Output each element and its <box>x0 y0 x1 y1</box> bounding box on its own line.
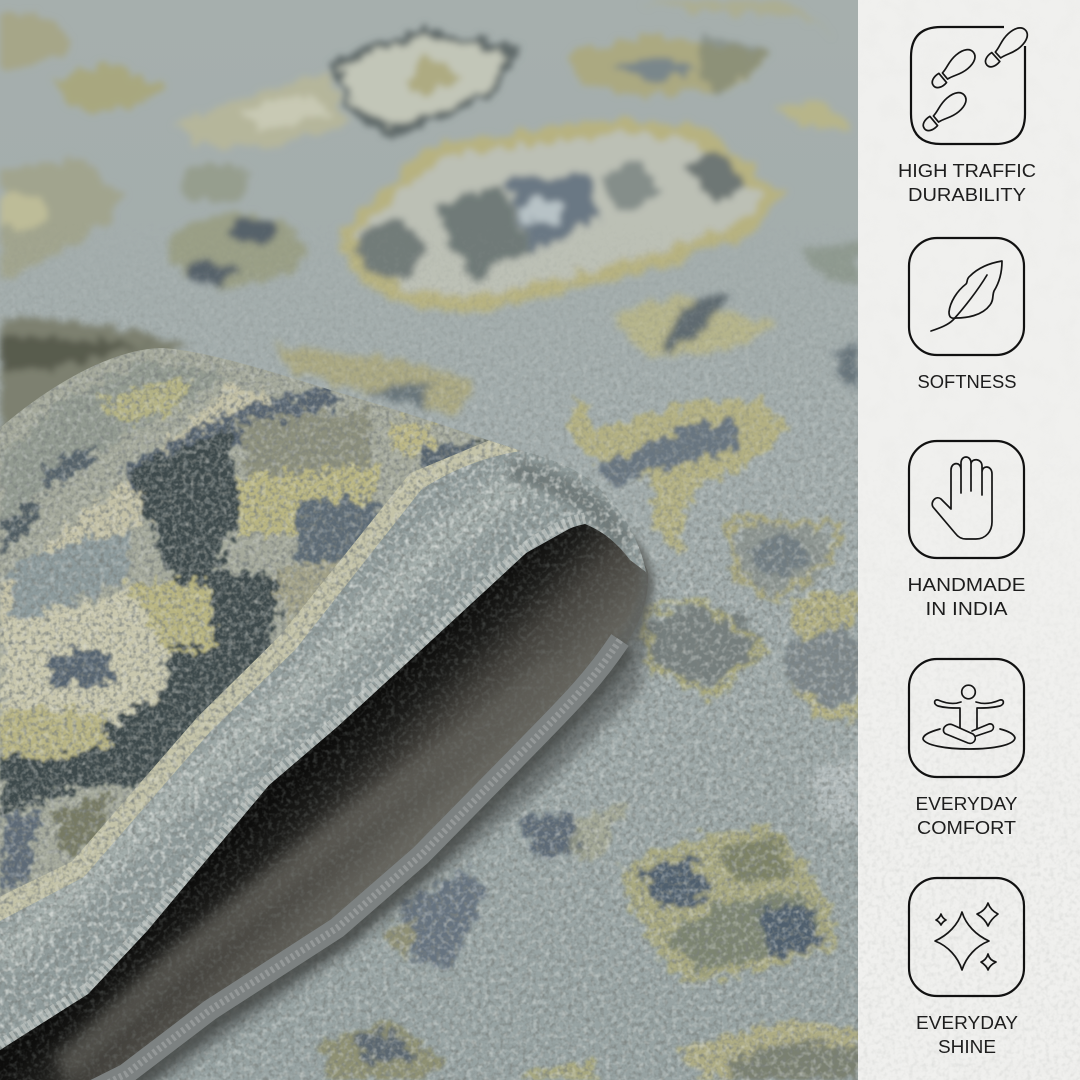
olive fold behind flap <box>0 318 190 440</box>
label: handmade in india: IN INDIA <box>926 599 1008 619</box>
lower-rug floral motifs <box>320 760 858 1080</box>
rolled grey binding edge <box>0 440 660 1060</box>
rug underside and hollow <box>0 520 648 1080</box>
label: everyday comfort: COMFORT <box>917 818 1016 838</box>
sidebar background <box>858 0 1080 1080</box>
icon: feather <box>909 238 1024 355</box>
label: handmade in india: HANDMADE <box>908 575 1026 595</box>
icon: footprints <box>911 24 1032 144</box>
label: everyday shine: SHINE <box>938 1037 996 1057</box>
feature: handmade in india <box>908 441 1026 619</box>
label: softness: SOFTNESS <box>918 372 1016 392</box>
corded edge of underside <box>90 640 624 1080</box>
icon: sparkles <box>909 878 1024 996</box>
icon: meditating figure <box>909 659 1024 777</box>
label: high traffic durability: DURABILITY <box>908 185 1026 205</box>
feature: everyday shine <box>909 878 1024 1057</box>
label: everyday shine: EVERYDAY <box>916 1013 1018 1033</box>
icon: hand <box>909 441 1024 558</box>
feature: everyday comfort <box>909 659 1024 838</box>
label: everyday comfort: EVERYDAY <box>916 794 1018 814</box>
flap pattern <box>0 340 540 950</box>
label: high traffic durability: HIGH TRAFFIC <box>898 161 1036 181</box>
floor shadow below fold <box>136 571 660 1080</box>
out-of-focus upper rug motifs <box>0 0 858 415</box>
mid-rug motifs <box>570 395 867 720</box>
feature: high traffic durability <box>898 24 1036 205</box>
feature: softness <box>909 238 1024 392</box>
fuzzy rim of fold <box>622 526 656 644</box>
